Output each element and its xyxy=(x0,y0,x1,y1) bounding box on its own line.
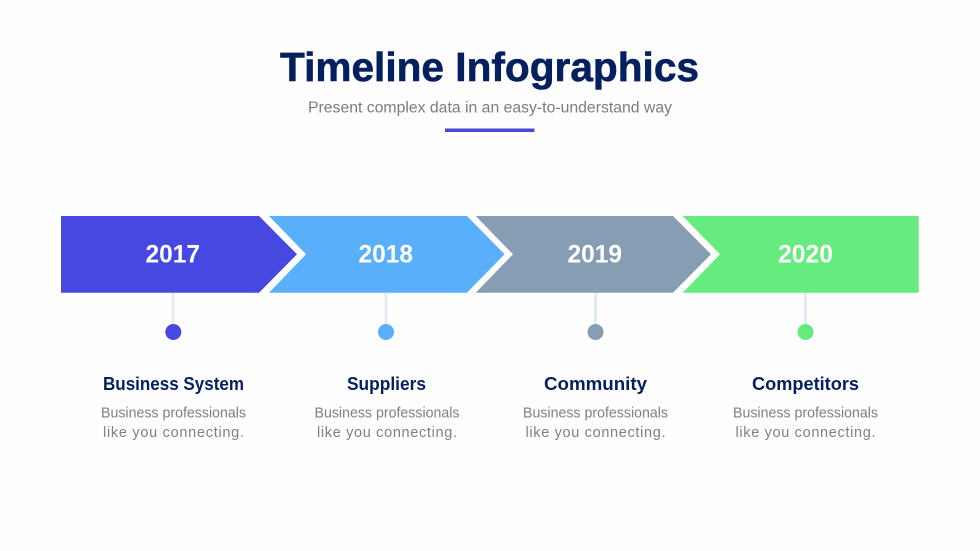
year: 2020: 2020 xyxy=(778,241,833,269)
connector: 2020 xyxy=(804,293,807,325)
panel: 2020 step xyxy=(683,216,919,441)
arrow: 2017 xyxy=(61,216,297,293)
description: Business System xyxy=(101,406,246,441)
description: Community: Business professionals xyxy=(523,406,668,422)
description: Suppliers: like you connecting. xyxy=(317,425,457,441)
description: Competitors xyxy=(733,406,878,441)
description: Suppliers: Business professionals xyxy=(314,406,460,422)
arrow: 2018 xyxy=(269,216,504,293)
heading: Community: Community xyxy=(544,374,647,394)
title: Timeline Infographics xyxy=(280,44,699,90)
year: 2017: 2017 xyxy=(146,241,200,269)
dot: 2020 xyxy=(798,324,814,340)
dot: 2019 xyxy=(588,324,604,340)
description: Competitors: like you connecting. xyxy=(736,425,876,441)
heading: Business System: Business System xyxy=(103,374,244,394)
year: 2019: 2019 xyxy=(568,241,622,269)
dot: 2018 xyxy=(378,324,394,340)
title underline xyxy=(445,128,534,132)
description: Business System: like you connecting. xyxy=(103,425,244,441)
subtitle: Present complex data in an easy-to-understand way xyxy=(308,100,672,116)
dot: 2017 xyxy=(165,324,181,340)
arrow: 2020 xyxy=(683,216,919,293)
description: Community: like you connecting. xyxy=(526,425,666,441)
panel: 2017 step xyxy=(61,216,297,441)
year: 2018: 2018 xyxy=(358,241,413,269)
connector: 2018 xyxy=(384,293,388,325)
panel: 2019 step xyxy=(476,216,711,441)
heading: Suppliers: Suppliers xyxy=(347,374,426,394)
connector: 2019 xyxy=(594,293,597,325)
description: Community xyxy=(523,406,668,441)
arrow: 2019 xyxy=(476,216,711,293)
description: Suppliers xyxy=(314,406,460,441)
heading: Competitors: Competitors xyxy=(752,374,859,394)
panel: 2018 step xyxy=(269,216,504,441)
description: Business System: Business professionals xyxy=(101,406,246,422)
connector: 2017 xyxy=(172,293,174,325)
description: Competitors: Business professionals xyxy=(733,406,878,422)
